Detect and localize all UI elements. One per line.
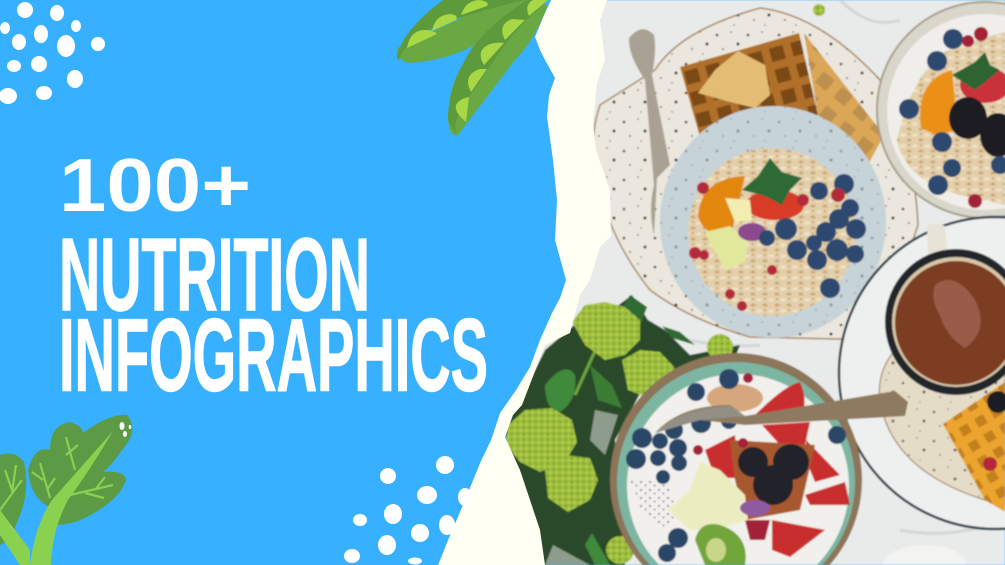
decor: marble veins [620,0,1005,533]
white object [883,545,967,565]
top right oatmeal bowl [877,2,1005,218]
yogurt bowl [610,353,908,565]
kiwi [695,524,746,565]
cup handle [927,224,948,256]
waffle right [804,33,884,163]
speckled plate [593,8,918,340]
food photo [505,0,1005,565]
coffee cup [885,249,1005,395]
title [59,143,488,412]
blackberries [738,444,809,505]
blueberries [626,369,846,562]
blue panel [0,0,566,565]
leaf shapes [28,415,132,525]
pea pod back [397,0,528,63]
strawberries [705,382,850,557]
title line: INFOGRAPHICS: INFOGRAPHICS [59,298,488,412]
blackberry [987,391,1005,413]
leaf highlights [120,422,131,437]
title line: 100+: 100+ [59,143,251,227]
leaf stems [0,431,113,565]
spoon [655,391,908,433]
torn paper edge [438,0,611,565]
pea pod front [448,0,548,135]
marble table [530,0,1005,565]
honey [707,384,763,412]
title line: NUTRITION: NUTRITION [59,217,370,332]
shaded gaps [590,410,618,455]
saucer [879,340,1005,505]
hydrangea flowers [506,4,825,564]
white dots top left [0,2,105,104]
white dots bottom [344,456,472,564]
leaf icon bottom left [0,415,132,565]
peas icon [397,0,548,135]
waffle bottom right [943,382,1005,512]
chia seeds [630,480,680,530]
spoon [629,29,670,235]
greens [505,295,740,565]
center oatmeal bowl [660,106,886,338]
waffle left [680,33,818,137]
flowers [668,462,748,530]
cup plate [839,217,1005,529]
strawberry piece [983,457,997,471]
honeycomb [698,51,770,108]
